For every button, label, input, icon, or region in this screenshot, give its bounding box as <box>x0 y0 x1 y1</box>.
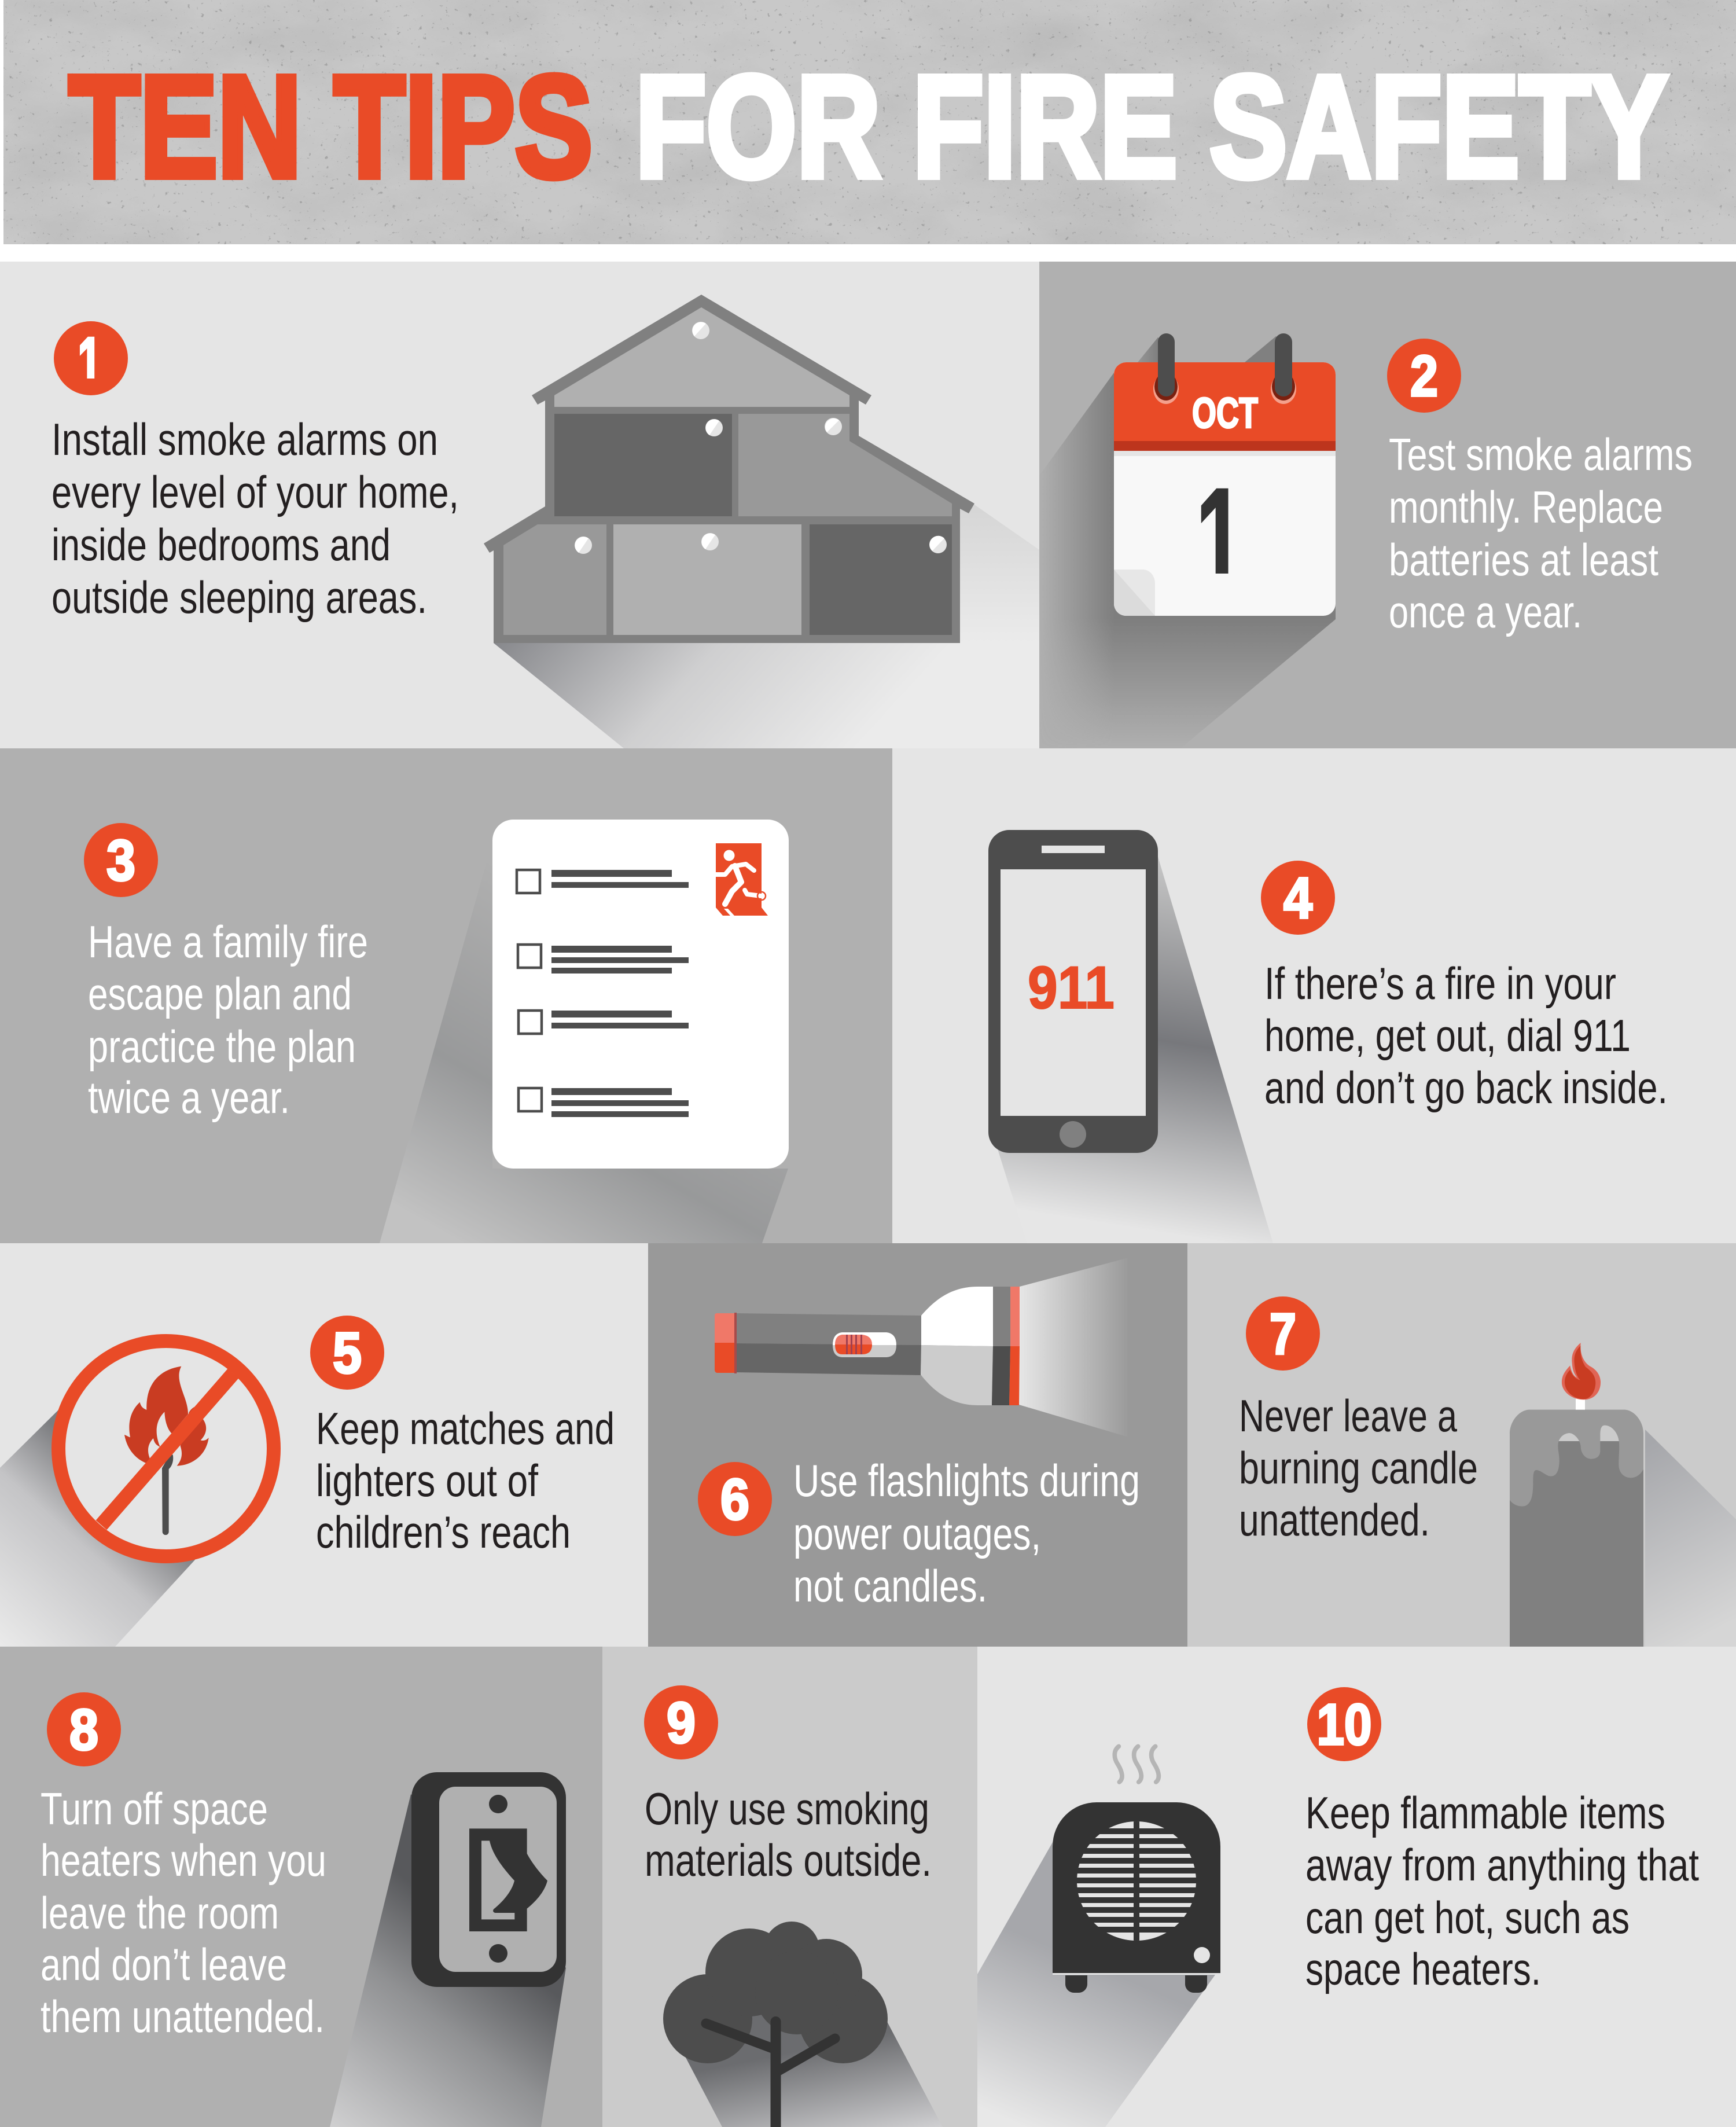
panel: tip 7 never leave a candle <box>1187 1243 1736 1647</box>
calendar long shadow <box>1039 336 1336 748</box>
text: tip 4 <box>1264 958 1668 1113</box>
text: tip 6: Use flashlights during <box>793 1455 1140 1506</box>
panel: tip 5 keep matches away <box>0 1243 648 1647</box>
text: tip 3: Have a family fire <box>88 916 368 967</box>
text: tip 5: Keep matches and <box>316 1403 615 1454</box>
checklist lines <box>551 870 689 1117</box>
panel: tip 6 use flashlights <box>648 1243 1187 1647</box>
number badge 3: 3 <box>106 828 135 893</box>
switch long shadow <box>330 1794 566 2127</box>
number badge 6 <box>698 1462 772 1536</box>
number badge 10: 10 <box>1317 1692 1371 1757</box>
number badge 5: 5 <box>333 1321 362 1386</box>
text: tip 6 <box>793 1455 1140 1611</box>
text: tip 3: escape plan and <box>88 968 352 1019</box>
text: tip 3: twice a year. <box>88 1072 290 1123</box>
text: tip 7: unattended. <box>1239 1494 1430 1545</box>
text: tip 10: space heaters. <box>1305 1944 1541 1994</box>
text: tip 7: Never leave a <box>1239 1390 1457 1441</box>
panel: tip 10 keep flammables away <box>977 1647 1736 2127</box>
text: tip 3 <box>88 916 368 1123</box>
tree long shadow <box>686 2014 943 2127</box>
text: tip 4: home, get out, dial 911 <box>1264 1010 1631 1061</box>
prohibition long shadow <box>0 1409 195 1647</box>
panel: tip 8 turn off space heaters <box>0 1647 602 2127</box>
panel: tip 2 test alarms monthly <box>1039 262 1736 749</box>
text: tip 1: Install smoke alarms on <box>52 414 438 465</box>
heater long shadow <box>977 1842 1215 2127</box>
number badge 3 <box>84 823 158 897</box>
house long shadow <box>494 505 1039 748</box>
text: tip 7: burning candle <box>1239 1442 1478 1493</box>
title <box>69 46 1668 207</box>
text: tip 1: inside bedrooms and <box>52 519 391 570</box>
text: tip 9: Only use smoking <box>645 1783 929 1834</box>
text: tip 8: them unattended. <box>41 1991 325 2042</box>
text: tip 9: materials outside. <box>645 1835 932 1886</box>
icon: steam <box>1115 1746 1158 1782</box>
flashlight switch <box>833 1332 896 1357</box>
text: tip 2: monthly. Replace <box>1389 482 1663 532</box>
icon: tree <box>663 1922 888 2127</box>
panel: tip 4 dial 911 <box>892 748 1736 1243</box>
text: tip 8: leave the room <box>41 1887 279 1938</box>
phone long shadow <box>993 857 1273 1243</box>
number badge 5 <box>310 1316 384 1390</box>
text: tip 2: once a year. <box>1389 586 1582 637</box>
text: tip 4: If there’s a fire in your <box>1264 958 1616 1009</box>
text: tip 8: heaters when you <box>41 1835 326 1886</box>
icon: space heater <box>1053 1802 1220 1993</box>
number badge 4: 4 <box>1283 866 1312 931</box>
calendar ring holes and rods <box>1153 333 1296 404</box>
heater grill <box>1076 1817 1197 1945</box>
candle long shadow <box>1645 1430 1736 1647</box>
text: tip 6: power outages, <box>793 1508 1041 1559</box>
checkboxes <box>517 870 542 1111</box>
number badge 2 <box>1387 339 1461 413</box>
text: tip 5: children’s reach <box>316 1507 571 1557</box>
number badge 7: 7 <box>1270 1302 1296 1366</box>
text: tip 8 <box>41 1783 326 2042</box>
phone number: 911 <box>1028 954 1115 1022</box>
icon: phone <box>988 830 1158 1153</box>
text: tip 9 <box>645 1783 932 1886</box>
card long shadow <box>380 841 788 1243</box>
text: tip 1: every level of your home, <box>52 466 459 517</box>
text: tip 3: practice the plan <box>88 1021 356 1072</box>
number badge 2: 2 <box>1410 344 1438 409</box>
icon: checklist card <box>492 820 789 1169</box>
text: tip 2: batteries at least <box>1389 534 1658 585</box>
panel: tip 1 smoke alarms on every level <box>0 262 1039 749</box>
icon: house cross-section <box>484 295 974 643</box>
title: TEN TIPS <box>69 46 593 207</box>
number badge 1: 1 <box>78 323 102 403</box>
text: tip 1 <box>52 414 459 623</box>
calendar month: OCT <box>1192 389 1258 437</box>
icon: candle <box>1510 1343 1643 1647</box>
text: tip 10: can get hot, such as <box>1305 1892 1630 1943</box>
number badge 4 <box>1261 861 1335 935</box>
flame and match <box>124 1366 209 1535</box>
text: tip 1: outside sleeping areas. <box>52 572 427 623</box>
text: tip 6: not candles. <box>793 1560 987 1611</box>
panel: tip 9 smoking outside <box>602 1647 977 2127</box>
icon: exit sign <box>716 843 768 916</box>
icon: light switch <box>411 1772 566 1987</box>
icon: no matches sign <box>58 1341 274 1556</box>
number badge 9 <box>644 1685 718 1759</box>
light beam <box>1019 1258 1128 1437</box>
text: tip 8: Turn off space <box>41 1783 268 1834</box>
text: tip 7 <box>1239 1390 1478 1545</box>
calendar day: 1 <box>1196 456 1244 626</box>
number badge 7 <box>1246 1296 1320 1371</box>
icon: smoke alarm dots <box>575 322 947 554</box>
panel: tip 3 escape plan <box>0 748 892 1243</box>
number badge 6: 6 <box>720 1467 749 1532</box>
text: tip 5 <box>316 1403 615 1557</box>
number badge 8: 8 <box>69 1698 98 1762</box>
icon: flashlight <box>715 1258 1128 1437</box>
number badge 1 <box>54 321 128 403</box>
number badge 9: 9 <box>667 1691 696 1755</box>
number badge 8 <box>47 1692 121 1766</box>
header banner <box>3 0 1736 244</box>
text: tip 10 <box>1305 1787 1699 1994</box>
text: tip 8: and don’t leave <box>41 1939 287 1990</box>
text: tip 2 <box>1389 429 1693 637</box>
icon: calendar <box>1114 333 1336 626</box>
text: tip 5: lighters out of <box>316 1455 538 1506</box>
